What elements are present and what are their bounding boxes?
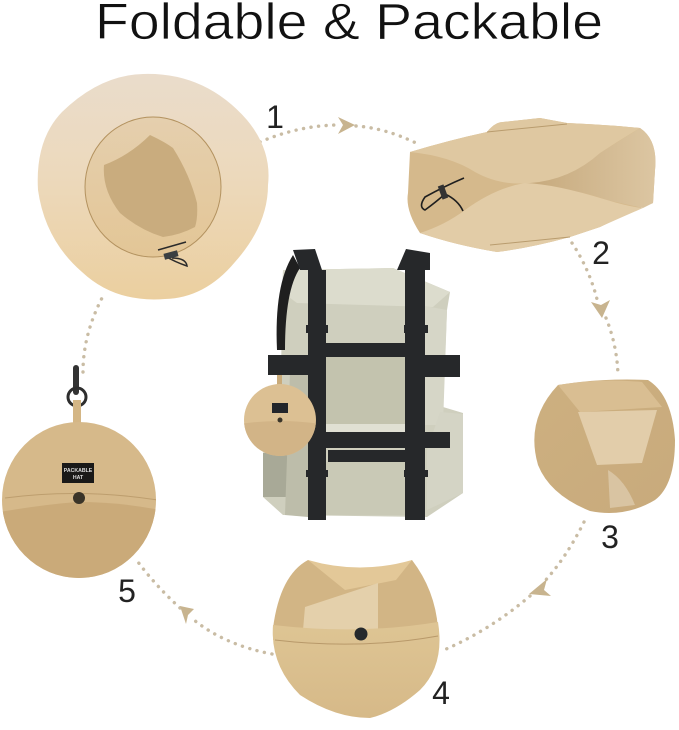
pouch step 5 with clip: [0, 365, 160, 590]
step number 1: 1: [266, 99, 284, 135]
pouch step 5 with clip: HAT: [73, 475, 84, 481]
step number 4: 4: [432, 675, 450, 711]
backpack: [240, 249, 463, 520]
hat step 3: [534, 380, 675, 513]
step number 3: 3: [601, 519, 619, 555]
hat step 2: [408, 118, 655, 252]
dotted circular path with arrows: [83, 117, 618, 654]
arrow 1: [338, 117, 355, 134]
pouch label: PACKABLE: [64, 468, 93, 474]
arrow 2: [591, 300, 610, 318]
step number 2: 2: [592, 235, 610, 271]
step number 5: 5: [118, 573, 136, 609]
attached pouch: [244, 375, 316, 456]
arrow 3: [529, 579, 551, 596]
hat step 1: [38, 74, 269, 299]
arrow 4: [180, 606, 194, 624]
hat step 4: [273, 560, 440, 718]
